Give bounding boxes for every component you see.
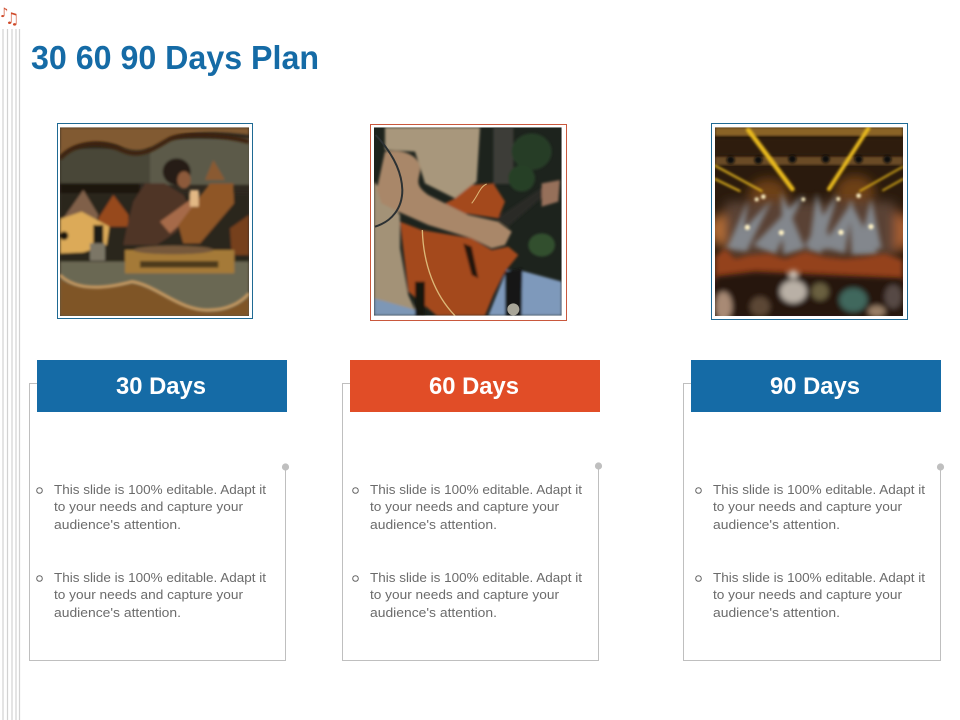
bullet list: 60 days: to your needs and capture your — [370, 499, 560, 514]
heading: 90 Days: 90 Days — [770, 373, 860, 400]
icon: music notes: ♫ — [5, 9, 19, 28]
bullet list: 90 days: This slide is 100% editable. Adapt it — [713, 482, 925, 497]
icon: music notes: ♪ — [0, 6, 8, 21]
photo frame: concert stage — [710, 124, 912, 322]
heading: 30 Days: 30 Days — [116, 373, 206, 400]
bullet list: 60 days: This slide is 100% editable. Adapt it — [370, 570, 582, 585]
bullet list: 30 days — [37, 482, 266, 620]
bullet list: 60 days: to your needs and capture your — [370, 587, 560, 602]
bullet list: 30 days: This slide is 100% editable. Adapt it — [54, 482, 266, 497]
photo frame: guitarist — [370, 124, 566, 320]
heading: 90 Days — [691, 360, 941, 412]
bullet list: 60 days: audience's attention. — [370, 605, 497, 620]
bullet list: 30 days: to your needs and capture your — [54, 587, 244, 602]
bullet list: 30 days: to your needs and capture your — [54, 499, 244, 514]
panel: 90 days — [684, 360, 944, 660]
bullet list: 90 days: audience's attention. — [713, 605, 840, 620]
bullet list: 30 days: This slide is 100% editable. Adapt it — [54, 570, 266, 585]
bullet list: 90 days: to your needs and capture your — [713, 499, 903, 514]
bullet list: 90 days — [696, 482, 925, 620]
bullet list: 90 days: to your needs and capture your — [713, 587, 903, 602]
bullet list: 90 days: This slide is 100% editable. Adapt it — [713, 570, 925, 585]
bullet list: 60 days: This slide is 100% editable. Adapt it — [370, 482, 582, 497]
bullet list: 60 days: audience's attention. — [370, 517, 497, 532]
heading: 30 Days — [37, 360, 287, 412]
panel: 60 days — [342, 360, 602, 660]
heading: 60 Days: 60 Days — [429, 373, 519, 400]
bullet list: 60 days — [353, 482, 582, 620]
heading: 60 Days — [350, 360, 600, 412]
title: 30 60 90 Days Plan — [31, 39, 319, 76]
icon: music notes — [0, 6, 19, 28]
bullet list: 30 days: audience's attention. — [54, 517, 181, 532]
bullet list: 90 days: audience's attention. — [713, 517, 840, 532]
bullet list: 30 days: audience's attention. — [54, 605, 181, 620]
panel: 30 days — [30, 360, 289, 660]
photo frame: luthier workshop — [58, 124, 252, 318]
